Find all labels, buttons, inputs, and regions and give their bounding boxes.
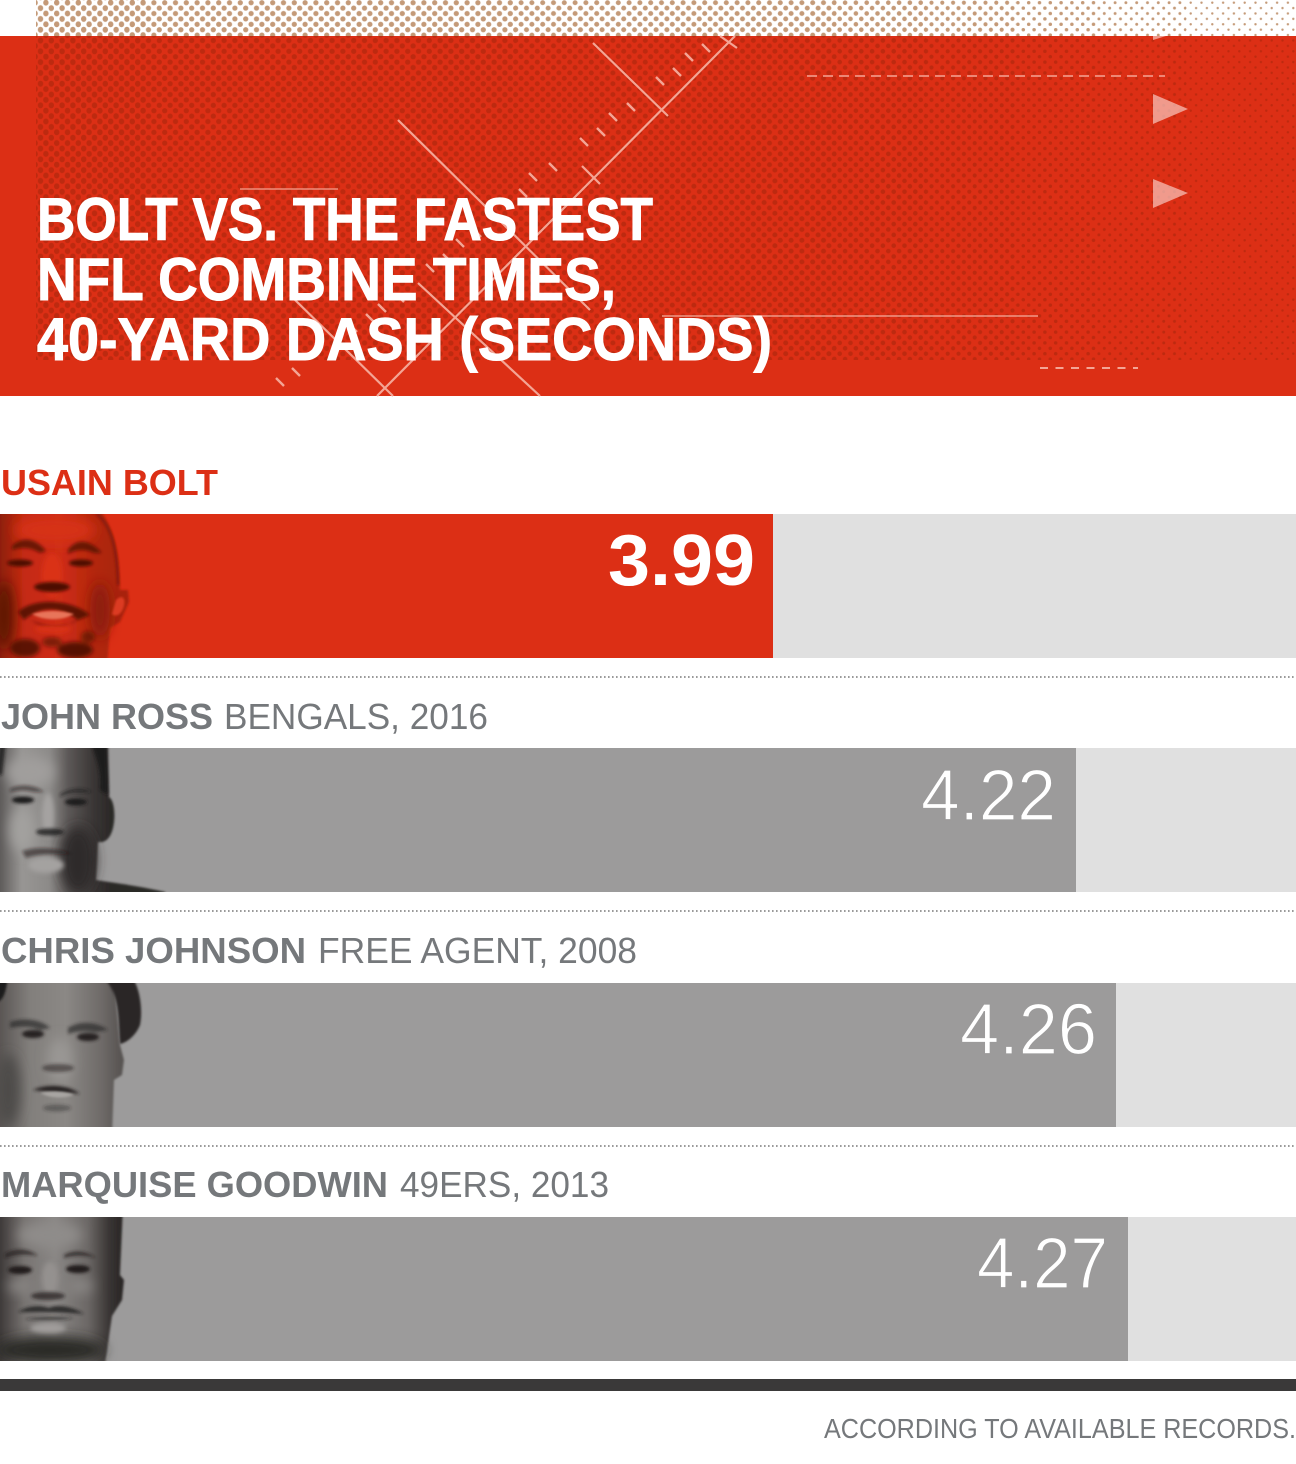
title: [37, 186, 772, 373]
name label: CHRIS JOHNSON: [1, 930, 306, 971]
panel: red header: [0, 0, 1296, 396]
icon: field marker triangle lower: [1153, 179, 1188, 208]
icon: field marker triangle upper: [1153, 94, 1188, 124]
dotted divider: [0, 1145, 1296, 1147]
value: 4.26: [960, 990, 1097, 1070]
title: BOLT VS. THE FASTEST: [37, 186, 653, 253]
row: Marquise Goodwin: [0, 1164, 1296, 1371]
halftone overlay: dark red dots: [36, 36, 1296, 360]
icon: small triangle tip at top edge: [1153, 36, 1166, 40]
row: Usain Bolt: [0, 462, 1296, 668]
value bar: [0, 748, 1076, 892]
name label: JOHN ROSS: [1, 696, 213, 737]
value: 3.99: [608, 521, 755, 601]
name label: 49ERS, 2013: [400, 1164, 609, 1205]
dotted divider: [0, 910, 1296, 912]
title: NFL COMBINE TIMES,: [37, 246, 616, 313]
value: 4.22: [921, 756, 1056, 836]
name label: FREE AGENT, 2008: [318, 930, 637, 971]
bar track: [0, 748, 1296, 892]
bar track: [0, 983, 1296, 1127]
row: Chris Johnson: [0, 930, 1296, 1137]
portrait: Usain Bolt: [0, 514, 130, 658]
name label: MARQUISE GOODWIN: [1, 1164, 388, 1205]
value: 4.27: [977, 1224, 1108, 1304]
portrait: John Ross: [0, 748, 166, 892]
halftone band: tan dots on white: [36, 0, 1296, 36]
bar track: [0, 514, 1296, 658]
value bar: [0, 983, 1116, 1127]
portrait: Marquise Goodwin: [0, 1217, 126, 1361]
title: 40-YARD DASH (SECONDS): [37, 306, 772, 373]
football field lines: [240, 36, 1165, 396]
value bar: [0, 1217, 1128, 1361]
bar track: [0, 1217, 1296, 1361]
value bar: [0, 514, 773, 658]
name label: USAIN BOLT: [1, 462, 218, 503]
bottom rule: [0, 1379, 1296, 1391]
dotted divider: [0, 676, 1296, 678]
row: John Ross: [0, 696, 1296, 900]
portrait: Chris Johnson: [0, 983, 143, 1127]
name label: BENGALS, 2016: [224, 696, 488, 737]
